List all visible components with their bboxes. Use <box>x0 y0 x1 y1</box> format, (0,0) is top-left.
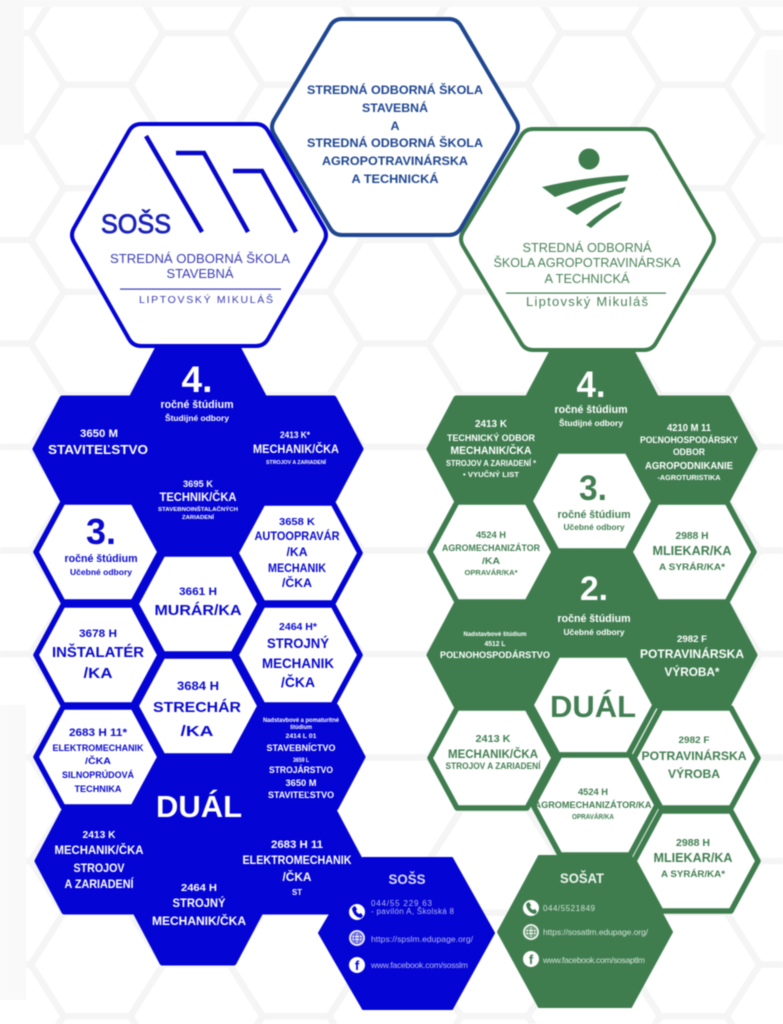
hex: 2413 K Mechanik dual: A ZARIADENÍ <box>64 878 134 891</box>
hex: 2464 H Strojný mechanik dual: STROJNÝ <box>172 895 226 910</box>
hex: 3658 K Autoopravár: MECHANIK <box>268 563 327 575</box>
hex: 3678 H Inštalatér: 3678 H <box>79 628 117 640</box>
hex: 4-year study SOŠS: 4. <box>182 359 212 400</box>
hex: 2464 H Strojný mechanik dual: 2464 H <box>181 882 217 894</box>
hex: 3650 M Staviteľstvo <box>35 398 161 500</box>
icon: phone <box>349 904 365 920</box>
hex: 2413 K Mechanik dual: MECHANIK/ČKA <box>54 844 144 857</box>
hex: 2988 H Mliekar dual <box>634 811 758 911</box>
hex: nadstavbové štúdium SOŠS: 3659 L <box>293 758 309 764</box>
hex: 2982 F Potravinárska výroba <box>629 604 755 706</box>
panel: SOŠAT contact hexagon: 044/5521849 <box>543 904 596 913</box>
hex: 4-year study SOŠAT: 4. <box>576 364 606 405</box>
hex: 4524 H Agromechanizátor dual: OPRAVÁR/KA <box>572 812 614 821</box>
hex: 4-year study SOŠAT <box>522 353 662 463</box>
hex: DUÁL SOŠAT <box>531 655 655 755</box>
title: A <box>390 121 400 133</box>
hex: 4-year study SOŠAT: Študijné odbory <box>559 417 623 428</box>
hex: 4524 H Agromechanizátor dual <box>533 755 657 855</box>
hex: 3684 H Strechár: /KA <box>180 723 214 740</box>
hex: 3-year study SOŠS: ročné štúdium <box>64 553 138 565</box>
hex: 3-year study SOŠAT <box>530 451 654 551</box>
hex: nadstavbové štúdium SOŠS: Nadstavbové a pomaturitné <box>263 718 340 724</box>
hex: 4210 M 11 Poľnohospodársky odbor: -AGROTURISTIKA <box>658 475 720 482</box>
hex: 2982 F Potravinárska výroba dual: 2982 F <box>678 735 710 746</box>
hex: 2464 H Strojný mechanik: 2464 H* <box>279 622 317 633</box>
hex: 2683 H 11 Elektromechanik: ELEKTROMECHANIK <box>52 743 144 754</box>
hex: 2982 F Potravinárska výroba dual <box>634 708 758 808</box>
hex: 4512 L Poľnohospodárstvo: POĽNOHOSPODÁRSTVO <box>440 650 550 661</box>
hex: 3678 H Inštalatér <box>36 605 160 705</box>
hex: 2683 H 11 Elektromechanik: SILNOPRÚDOVÁ <box>62 769 134 781</box>
panel: SOŠS logo hexagon: STREDNÁ ODBORNÁ ŠKOLA <box>110 251 290 266</box>
title: STREDNÁ ODBORNÁ ŠKOLA <box>307 84 483 97</box>
icon: globe <box>523 924 539 940</box>
hex: 3684 H Strechár <box>136 656 260 756</box>
hex: 3-year study SOŠAT: Učebné odbory <box>564 522 625 532</box>
hex: 2413 K Mechanik dual green: 2413 K <box>476 734 511 745</box>
hex: 2982 F Potravinárska výroba: VÝROBA* <box>664 664 720 679</box>
panel: SOŠS contact hexagon: SOŠS <box>388 870 426 887</box>
hex: nadstavbové štúdium SOŠS: štúdium <box>290 725 312 731</box>
hex: nadstavbové štúdium SOŠS: 3650 M <box>286 778 316 788</box>
hex: 3-year study SOŠS <box>36 502 160 602</box>
hex: 4210 M 11 Poľnohospodársky odbor: ODBOR <box>673 447 705 457</box>
hex: 2413 K Mechanik dual: 2413 K <box>82 830 116 841</box>
hex: 3-year study SOŠAT: ročné štúdium <box>558 509 631 521</box>
panel: SOŠAT contact hexagon <box>498 856 672 1007</box>
hex: 4-year study SOŠS <box>128 349 268 459</box>
hex: 2-year study SOŠAT <box>529 552 655 654</box>
hex: 2988 H Mliekar <box>630 502 754 602</box>
hex: 4524 H Agromechanizátor: AGROMECHANIZÁTOR <box>442 543 540 553</box>
hex: 2683 H 11 Elektromechanik: /ČKA <box>85 755 111 767</box>
hex: 2464 H Strojný mechanik: STROJNÝ <box>267 634 330 651</box>
hex: 2413 K Technický odbor: MECHANIK/ČKA <box>450 444 532 457</box>
hex: 3650 M Staviteľstvo: STAVITEĽSTVO <box>48 442 148 457</box>
panel: SOŠS contact hexagon: - pavilón A, Školská 8 <box>371 907 455 916</box>
hex: 2-year study SOŠAT: Učebné odbory <box>564 627 625 637</box>
hex: 2683 H 11 Elektromechanik dual: /ČKA <box>282 871 312 884</box>
icon: globe <box>349 930 365 946</box>
hex: 4524 H Agromechanizátor <box>430 502 554 602</box>
hex: 4524 H Agromechanizátor: 4524 H <box>476 530 506 540</box>
hex: 4524 H Agromechanizátor: OPRAVÁR/KA* <box>464 568 518 577</box>
hex: 4-year study SOŠS: Študijné odbory <box>165 412 229 423</box>
hex: 2683 H 11 Elektromechanik: 2683 H 11* <box>69 727 128 739</box>
hex: 2413 K Mechanik: MECHANIK/ČKA <box>253 443 339 456</box>
hex: nadstavbové štúdium SOŠS: STAVITEĽSTVO <box>268 790 334 801</box>
panel: SOŠAT contact hexagon: www.facebook.com/sosaptlm <box>542 955 645 965</box>
hex: 2683 H 11 Elektromechanik dual: 2683 H 11 <box>271 839 323 851</box>
panel: central title hexagon <box>272 19 518 235</box>
hex: 4210 M 11 Poľnohospodársky odbor: POĽNOHOSPODÁRSKY <box>640 435 738 445</box>
hex: 3-year study SOŠAT: 3. <box>579 469 607 508</box>
hex: 2683 H 11 Elektromechanik: TECHNIKA <box>74 784 122 795</box>
hex: 3650 M Staviteľstvo: 3650 M <box>80 428 118 440</box>
hex: 3695 K Technik <box>135 456 261 558</box>
hex: 4210 M 11 Poľnohospodársky odbor: AGROPODNIKANIE <box>645 461 733 472</box>
hex: 4512 L Poľnohospodárstvo <box>429 604 555 706</box>
hex: 2413 K Technický odbor: 2413 K <box>475 419 508 430</box>
hex: 2464 H Strojný mechanik dual <box>135 861 261 963</box>
panel: SOŠS contact hexagon: 044/55 229 63 <box>371 899 433 908</box>
hex: 2413 K Technický odbor: STROJOV A ZARIADENÍ * <box>446 459 537 468</box>
hex: 3661 H Murár: MURÁR/KA <box>154 602 242 619</box>
hex: 2683 H 11 Elektromechanik <box>36 707 160 807</box>
hex: 3684 H Strechár: 3684 H <box>177 679 219 693</box>
hex: nadstavbové štúdium SOŠS: STROJÁRSTVO <box>269 765 333 776</box>
hex: 2413 K Mechanik dual green <box>430 708 554 808</box>
hex: 3695 K Technik: STAVEBNOINŠTALAČNÝCH <box>158 505 238 513</box>
panel: SOŠAT logo hexagon: Liptovský Mikuláš <box>526 294 648 309</box>
hex: 2464 H Strojný mechanik <box>236 605 360 705</box>
hex: nadstavbové štúdium SOŠS <box>237 706 363 808</box>
title <box>307 84 483 186</box>
icon: facebook: f <box>355 958 360 973</box>
hex: 2464 H Strojný mechanik: MECHANIK <box>262 655 334 671</box>
title: STAVEBNÁ <box>362 102 428 115</box>
title: A TECHNICKÁ <box>352 173 438 186</box>
hex: 4-year study SOŠS: ročné štúdium <box>160 399 234 411</box>
panel: SOŠAT logo hexagon: STREDNÁ ODBORNÁ <box>522 240 652 255</box>
hex: 2683 H 11 Elektromechanik dual: ELEKTROMECHANIK <box>242 855 352 867</box>
icon: SOŠAT sun and field logo <box>542 148 629 228</box>
title: AGROPOTRAVINÁRSKA <box>322 155 468 168</box>
panel: SOŠAT logo hexagon: ŠKOLA AGROPOTRAVINÁRSKA <box>494 255 681 270</box>
icon: facebook <box>349 957 365 973</box>
hex: 3658 K Autoopravár: AUTOOPRAVÁR <box>254 530 340 543</box>
hex: 3-year study SOŠS: 3. <box>86 511 116 552</box>
hex: 2464 H Strojný mechanik dual: MECHANIK/ČKA <box>152 913 246 928</box>
panel: SOŠS contact hexagon <box>319 858 494 1009</box>
hex: 3661 H Murár: 3661 H <box>179 586 217 598</box>
hex: nadstavbové štúdium SOŠS: 2414 L 01 <box>286 734 317 740</box>
hex: 2-year study SOŠAT: 2. <box>580 570 608 608</box>
hex: 2988 H Mliekar: 2988 H <box>676 531 708 542</box>
panel: SOŠS logo hexagon: SOŠS <box>101 208 171 239</box>
hex: nadstavbové štúdium SOŠS: STAVEBNÍCTVO <box>266 743 336 754</box>
hex: 2982 F Potravinárska výroba: POTRAVINÁRSKA <box>640 646 744 661</box>
hex: 2413 K Mechanik: 2413 K* <box>280 430 310 440</box>
hex: 3684 H Strechár: STRECHÁR <box>153 699 241 716</box>
hex: 2413 K Mechanik dual green: STROJOV A ZARIADENÍ <box>446 761 541 771</box>
icon: facebook: f <box>529 952 534 967</box>
hex: 2413 K Mechanik dual green: MECHANIK/ČKA <box>448 746 538 761</box>
hex: 4210 M 11 Poľnohospodársky odbor <box>629 398 755 500</box>
hex: DUÁL SOŠS <box>135 757 261 859</box>
hex: 4524 H Agromechanizátor: /KA <box>482 556 501 566</box>
hex: 4512 L Poľnohospodárstvo: 4512 L <box>484 641 506 648</box>
hex: 3678 H Inštalatér: INŠTALATÉR <box>52 643 144 661</box>
hex: 2413 K Mechanik dual: STROJOV <box>74 863 125 875</box>
hex: 4512 L Poľnohospodárstvo: Nadstavbové štúdium <box>464 632 526 638</box>
hex: 2982 F Potravinárska výroba dual: VÝROBA <box>668 766 720 781</box>
hex: 2988 H Mliekar: MLIEKAR/KA <box>652 544 732 558</box>
panel: SOŠS contact hexagon: https://spslm.edupage.org/ <box>371 934 474 944</box>
panel: SOŠS contact hexagon: www.facebook.com/sosslm <box>370 960 468 970</box>
hex: DUÁL SOŠS: DUÁL <box>156 789 242 824</box>
panel: SOŠAT logo hexagon: A TECHNICKÁ <box>544 271 630 286</box>
hex: 2413 K Mechanik: STROJOV A ZARIADENÍ <box>266 458 327 466</box>
panel: SOŠAT logo hexagon <box>461 129 714 350</box>
hex: 4210 M 11 Poľnohospodársky odbor: 4210 M 11 <box>667 423 711 434</box>
panel: SOŠAT contact hexagon: SOŠAT <box>560 869 604 886</box>
hex: 2988 H Mliekar dual: 2988 H <box>676 838 710 849</box>
hex: DUÁL SOŠAT: DUÁL <box>550 689 636 724</box>
hex: 3695 K Technik: ZARIADENÍ <box>182 513 215 521</box>
hex: 3658 K Autoopravár: /KA <box>286 547 308 559</box>
hex: 3695 K Technik: 3695 K <box>183 479 214 489</box>
hex: 2982 F Potravinárska výroba: 2982 F <box>677 634 707 645</box>
hex: 2413 K Mechanik <box>235 398 361 500</box>
icon: phone <box>523 900 539 916</box>
hex: 4524 H Agromechanizátor dual: 4524 H <box>578 787 608 797</box>
hex: 2413 K Technický odbor: TECHNICKÝ ODBOR <box>447 432 535 443</box>
hex: 2413 K Mechanik dual <box>37 810 163 912</box>
hex: 3695 K Technik: TECHNIK/ČKA <box>160 491 236 504</box>
hex: 2464 H Strojný mechanik: /ČKA <box>281 673 315 690</box>
title: STREDNÁ ODBORNÁ ŠKOLA <box>307 137 483 150</box>
hex: 2988 H Mliekar: A SYRÁR/KA* <box>659 562 725 573</box>
hex: 2413 K Technický odbor: • VYUČNÝ LIST <box>463 470 519 479</box>
panel: SOŠS logo hexagon: STAVEBNÁ <box>166 266 234 281</box>
hex: 2683 H 11 Elektromechanik dual <box>235 810 361 912</box>
hex: 3658 K Autoopravár <box>236 503 360 603</box>
hex: 2988 H Mliekar dual: A SYRÁR/KA* <box>661 869 725 880</box>
hex: 2982 F Potravinárska výroba dual: POTRAVINÁRSKA <box>642 748 747 763</box>
hex: 2-year study SOŠAT: ročné štúdium <box>558 613 631 625</box>
panel: SOŠAT contact hexagon: https://sosatlm.edupage.org/ <box>543 927 649 937</box>
hex: 3-year study SOŠS: Učebné odbory <box>70 567 132 577</box>
hex: 3661 H Murár <box>136 554 260 654</box>
hex: 2413 K Technický odbor <box>429 398 555 500</box>
hex: 4524 H Agromechanizátor dual: AGROMECHANIZÁTOR/KA <box>534 800 652 811</box>
hex: 2988 H Mliekar dual: MLIEKAR/KA <box>654 851 732 865</box>
icon: facebook <box>523 951 539 967</box>
hex: 2683 H 11 Elektromechanik dual: ST <box>292 888 302 897</box>
panel: SOŠS logo hexagon: LIPTOVSKÝ MIKULÁŠ <box>139 293 273 306</box>
hex: 3658 K Autoopravár: /ČKA <box>282 577 312 590</box>
hex: 3678 H Inštalatér: /KA <box>84 665 113 682</box>
panel: SOŠS logo hexagon <box>72 124 326 346</box>
icon: SOŠS roof lines logo <box>146 136 296 232</box>
hex: 3658 K Autoopravár: 3658 K <box>279 516 315 528</box>
hex: 4-year study SOŠAT: ročné štúdium <box>554 404 628 416</box>
